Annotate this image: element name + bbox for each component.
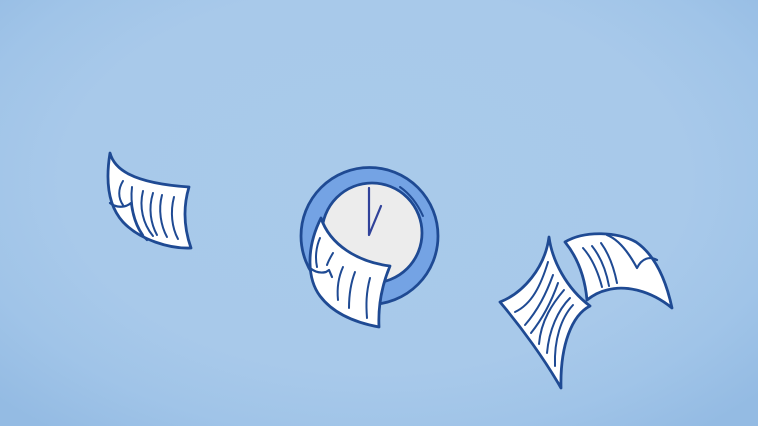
icon: clock <box>301 168 438 304</box>
icon: paper right lower <box>500 237 590 388</box>
icon: paper right upper <box>565 234 672 308</box>
clock ring <box>301 168 438 304</box>
ring highlight <box>400 187 423 216</box>
icon: paper over clock <box>310 218 390 327</box>
clock face <box>322 183 422 283</box>
clock hands <box>369 188 381 235</box>
icon: paper left <box>108 153 191 248</box>
